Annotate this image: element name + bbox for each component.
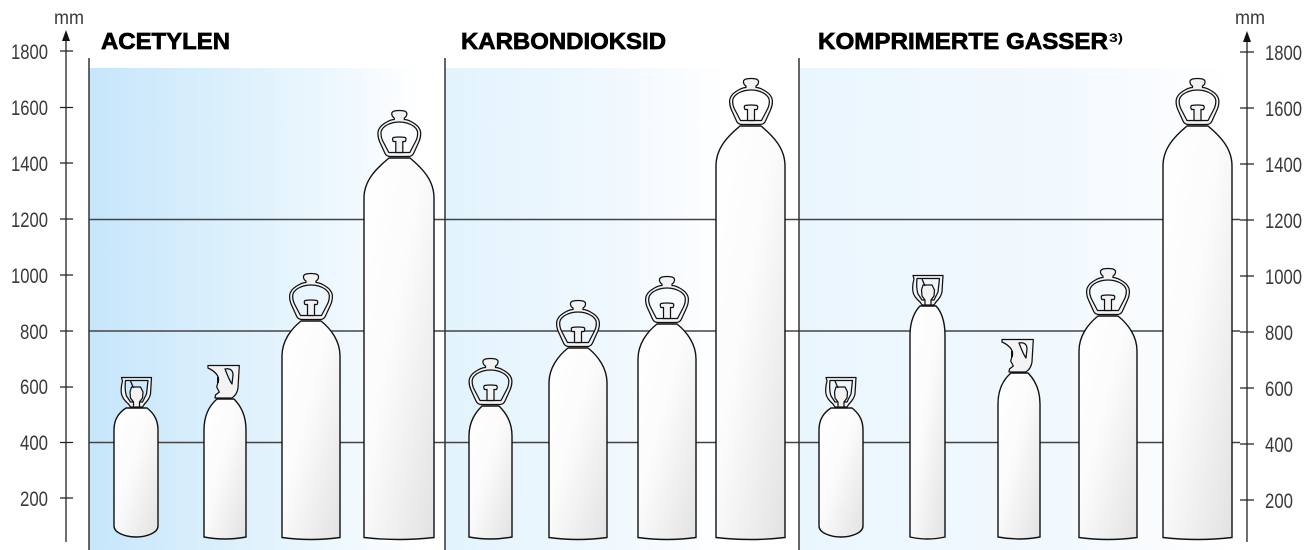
right axis unit: mm <box>1235 8 1265 29</box>
right axis labels: 1800 <box>1265 42 1302 65</box>
left axis <box>11 8 84 542</box>
right axis labels: 1000 <box>1265 266 1302 289</box>
right axis labels: 200 <box>1265 490 1293 513</box>
cylinder: karbondioksid 2 <box>549 300 607 540</box>
cylinder: gass 4 <box>1079 268 1137 540</box>
right axis labels <box>1265 42 1302 513</box>
right axis labels: 1600 <box>1265 98 1302 121</box>
cylinder: gass 2 <box>910 276 945 539</box>
cylinder: gass 1 <box>819 378 863 537</box>
left axis unit: mm <box>54 8 84 29</box>
heading: acetylen: ACETYLEN <box>101 28 230 54</box>
left axis labels: 1200 <box>11 209 48 232</box>
left axis labels: 1400 <box>11 153 48 176</box>
left axis labels: 1800 <box>11 41 48 64</box>
right axis labels: 1400 <box>1265 154 1302 177</box>
cylinder: acetylen 3 <box>282 274 340 540</box>
left axis labels: 400 <box>20 432 48 455</box>
left axis labels: 800 <box>20 321 48 344</box>
left axis labels: 1000 <box>11 265 48 288</box>
left axis labels <box>11 41 48 511</box>
left axis labels: 1600 <box>11 97 48 120</box>
panel: karbondioksid background <box>445 68 799 550</box>
footnote marker: 3) <box>1109 31 1123 45</box>
cylinder: acetylen 1 <box>114 378 158 537</box>
right axis labels: 400 <box>1265 434 1293 457</box>
cylinder: karbondioksid 3 <box>638 276 696 540</box>
left axis labels: 600 <box>20 376 48 399</box>
cylinder: karbondioksid 1 <box>469 358 512 539</box>
cylinder: acetylen 4 <box>364 110 434 540</box>
panel: acetylen background <box>89 68 445 550</box>
right axis <box>1235 8 1302 542</box>
right axis labels: 800 <box>1265 322 1293 345</box>
panel: komprimerte gasser background <box>799 68 1240 550</box>
cylinder: gass 5 <box>1163 78 1232 540</box>
right axis labels: 600 <box>1265 378 1293 401</box>
cylinder: acetylen 2 <box>204 366 246 539</box>
left axis labels: 200 <box>20 488 48 511</box>
right axis labels: 1200 <box>1265 210 1302 233</box>
heading: komprimerte gasser: KOMPRIMERTE GASSER <box>818 28 1108 54</box>
cylinder: karbondioksid 4 <box>716 78 785 540</box>
cylinder: gass 3 <box>998 340 1040 539</box>
heading: karbondioksid: KARBONDIOKSID <box>461 28 666 54</box>
